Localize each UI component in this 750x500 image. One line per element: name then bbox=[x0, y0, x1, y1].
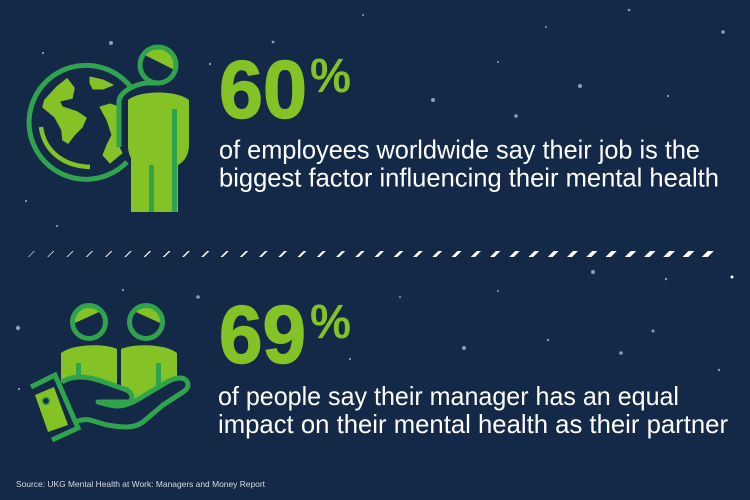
source note: Source: UKG Mental Health at Work: Managers and Money Report bbox=[16, 479, 266, 489]
statistic: 60%: % bbox=[310, 50, 351, 103]
cuff bbox=[31, 375, 78, 440]
statistic: 69%: 69 bbox=[219, 290, 306, 380]
text: first statistic description: of employees worldwide say their job is the bbox=[219, 134, 700, 164]
continents bbox=[43, 77, 122, 163]
text: second statistic description: of people say their manager has an equal bbox=[218, 381, 679, 411]
person body bbox=[128, 92, 189, 212]
text: second statistic description bbox=[218, 381, 728, 439]
text: first statistic description bbox=[219, 134, 719, 192]
dashed divider bbox=[28, 251, 714, 257]
people bodies bbox=[61, 345, 117, 395]
globe ring bbox=[29, 65, 130, 179]
statistic: 60% bbox=[219, 44, 351, 136]
globe inner arc bbox=[41, 127, 90, 167]
statistic: 69% bbox=[219, 290, 351, 380]
text: first statistic description: biggest factor influencing their mental health bbox=[219, 162, 719, 192]
people heads bbox=[73, 306, 101, 324]
person arm and body lines bbox=[119, 83, 160, 147]
statistic: 60%: 60 bbox=[219, 44, 307, 136]
statistic: 69%: % bbox=[310, 296, 351, 349]
person head bbox=[144, 47, 176, 70]
icon: person with globe bbox=[29, 47, 189, 212]
text: second statistic description: impact on their mental health as their partner bbox=[218, 409, 728, 439]
hand bbox=[55, 377, 188, 427]
icon: two people held in a hand bbox=[31, 306, 188, 440]
